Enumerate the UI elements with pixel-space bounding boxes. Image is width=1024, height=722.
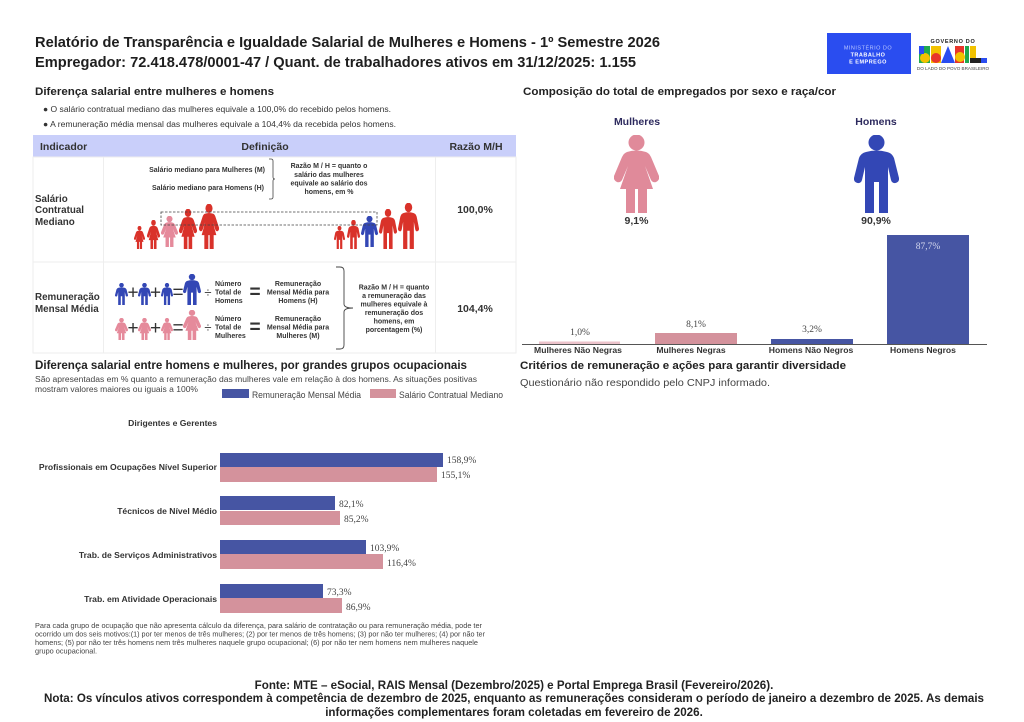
formula: remuneração mulheres: Mulheres (215, 333, 246, 340)
value labels (327, 456, 476, 613)
definition: razão M/H remuneração: porcentagem (%) (366, 327, 422, 334)
logo: Ministério do Trabalho e Emprego: E EMPREGO (849, 60, 887, 66)
row label: salário contratual mediano (35, 194, 84, 228)
bar chart: sexo e raça/cor: Homens Negros (890, 345, 956, 355)
category labels: Trab. em Atividade Operacionais (84, 594, 217, 604)
title: Empregador: 72.418.478/0001-47 / Quant. de trabalhadores ativos em 31/12/2025: 1.155 (35, 55, 636, 71)
definition: razão M/H salário (290, 163, 368, 196)
definition: razão M/H salário: Razão M / H = quanto o (291, 163, 367, 170)
logo: Ministério do Trabalho e Emprego: MINISTÉRIO DO (844, 44, 892, 52)
formula: remuneração homens: Homens (H) (278, 298, 318, 305)
formula: remuneração mulheres: + (127, 318, 139, 339)
definition: razão M/H remuneração: mulheres equivale à (361, 302, 428, 308)
formula: remuneração homens: ÷ (204, 285, 212, 300)
text block: explicação: mostram valores maiores ou iguais a 100% (35, 384, 198, 394)
heading: grupos ocupacionais: Diferença salarial entre homens e mulheres, por grandes grupos ocupacionais (35, 360, 467, 372)
formula: remuneração mulheres: = (172, 318, 184, 339)
value: homens: 90,9% (861, 215, 892, 227)
definition: salário mediano labels: Salário mediano para Mulheres (M) (149, 167, 265, 174)
value labels: 73,3% (327, 588, 352, 598)
heading: composição: Composição do total de empregados por sexo e raça/cor (523, 86, 837, 98)
value labels: 86,9% (346, 603, 371, 613)
value labels: 85,2% (344, 515, 369, 525)
formula: remuneração homens: Total de (215, 290, 241, 296)
panel: composição por sexo (614, 116, 899, 227)
formula: remuneração mulheres: + (150, 318, 161, 339)
footer: fonte e nota: Fonte: MTE – eSocial, RAIS Mensal (Dezembro/2025) e Portal Emprega Brasil (Fevereiro/2026). (255, 679, 773, 692)
table header: Indicador (40, 141, 87, 153)
row label: salário contratual mediano: Mediano (35, 217, 75, 228)
category labels: Trab. de Serviços Administrativos (79, 550, 217, 560)
definition: razão M/H salário: homens, em % (304, 189, 354, 196)
bar chart: sexo e raça/cor: 3,2% (802, 325, 822, 335)
text block: resumo: ● A remuneração média mensal das mulheres equivale a 104,4% da recebida pelos homens. (43, 119, 396, 129)
bars: salário contratual mediano (220, 467, 437, 613)
category labels: Técnicos de Nível Médio (117, 506, 217, 516)
footer: fonte e nota: Nota: Os vínculos ativos correspondem à competência de dezembro de 2025, enquanto as remunerações consideram o período de janeiro a dezembro de 2025. As demais (44, 692, 984, 705)
bar chart: sexo e raça/cor: 1,0% (570, 328, 590, 338)
definition: razão M/H remuneração: homens, em (374, 318, 414, 326)
definition: razão M/H salário: salário das mulheres (294, 172, 364, 179)
formula: remuneração homens: = (172, 282, 184, 304)
formula: remuneração mulheres: ÷ (204, 320, 212, 335)
text block: resumo (43, 104, 396, 129)
definition: razão M/H remuneração: remuneração dos (365, 310, 423, 317)
logo: Ministério do Trabalho e Emprego: TRABALHO (851, 52, 886, 58)
category labels: Dirigentes e Gerentes (128, 418, 217, 428)
legend: Remuneração Mensal Média (252, 390, 362, 401)
formula: remuneração homens (115, 274, 329, 305)
formula: remuneração mulheres: Total de (215, 324, 241, 332)
value labels: 82,1% (339, 500, 364, 510)
formula: remuneração mulheres: = (249, 317, 261, 338)
footnote: ocorrido um dos seis motivos:(1) por ter menos de três mulheres; (2) por ter menos de três homens; (3) por não ter mulheres; (4) por não ter (35, 630, 485, 638)
table header: Definição (241, 141, 289, 153)
icon: mulher (614, 134, 659, 213)
table header (40, 141, 503, 153)
bar chart: sexo e raça/cor: Mulheres Negras (656, 345, 726, 355)
value labels: 103,9% (370, 544, 399, 554)
bar chart: grupos ocupacionais (39, 418, 476, 613)
text block: resumo: ● O salário contratual mediano das mulheres equivale a 100,0% do recebido pelos homens. (43, 104, 391, 114)
footnote: homens; (5) por não ter três homens nem três mulheres naquele grupo ocupacional; (6) por não ter nem homens nem mulheres naquele (35, 638, 478, 647)
value labels: 116,4% (387, 559, 416, 569)
formula: remuneração mulheres: Remuneração (275, 316, 321, 323)
logo: Ministério do Trabalho e Emprego (827, 33, 911, 74)
text block: explicação (35, 374, 478, 394)
bar chart: sexo e raça/cor: Mulheres Não Negras (534, 345, 622, 355)
value: mulheres: 9,1% (625, 215, 649, 227)
icons: homens em ordem de salário (334, 203, 419, 249)
row label: remuneração mensal média: Mensal Média (35, 304, 99, 315)
formula: remuneração homens: + (127, 282, 139, 304)
definition: razão M/H remuneração: Razão M / H = quanto (359, 284, 429, 292)
footnote: Para cada grupo de ocupação que não apresenta cálculo da diferença, para salário de contratação ou para remuneração média, pode ter (35, 621, 482, 630)
formula: remuneração homens: + (150, 282, 161, 304)
icon: homem (854, 134, 899, 213)
formula: remuneração homens: = (249, 282, 261, 303)
bar chart: sexo e raça/cor: Homens Não Negros (769, 345, 853, 355)
row label: remuneração mensal média (35, 292, 100, 315)
title: Relatório de Transparência e Igualdade Salarial de Mulheres e Homens - 1º Semestre 2026 (35, 35, 660, 51)
definition: razão M/H remuneração: a remuneração das (362, 293, 426, 300)
formula: remuneração homens: Mensal Média para (267, 290, 329, 296)
bars: remuneração mensal média (220, 453, 443, 598)
table: indicadores (33, 135, 516, 353)
label: homens: Homens (855, 116, 897, 128)
footnote: grupo ocupacional. (35, 646, 97, 656)
bar chart: sexo e raça/cor (522, 235, 987, 355)
value: razão salário: 100,0% (457, 204, 493, 216)
bar chart: sexo e raça/cor: 87,7% (916, 242, 940, 252)
bar chart: sexo e raça/cor: 8,1% (686, 320, 706, 330)
footer: fonte e nota: informações complementares foram coletadas em fevereiro de 2026. (325, 706, 703, 719)
formula: remuneração mulheres: Mulheres (M) (276, 333, 320, 340)
row label: salário contratual mediano: Salário (35, 194, 68, 205)
legend: Salário Contratual Mediano (399, 390, 503, 401)
table header: Razão M/H (449, 141, 503, 153)
legend (222, 389, 503, 401)
category labels (39, 418, 218, 604)
formula: remuneração homens: Homens (215, 298, 243, 305)
label: mulheres: Mulheres (614, 116, 660, 128)
value labels: 155,1% (441, 471, 470, 481)
row label: remuneração mensal média: Remuneração (35, 292, 100, 303)
text block: explicação: São apresentadas em % quanto a remuneração das mulheres vale em relação à dos homens. As situações positivas (35, 374, 478, 384)
formula: remuneração homens: Remuneração (275, 281, 321, 288)
value labels: 158,9% (447, 456, 476, 466)
formula: remuneração mulheres: Número (215, 316, 241, 323)
value: razão remuneração: 104,4% (457, 303, 493, 315)
footer: fonte e nota (44, 679, 984, 719)
definition: razão M/H salário: equivale ao salário dos (290, 180, 368, 188)
row label: salário contratual mediano: Contratual (35, 205, 84, 216)
formula: remuneração homens: Número (215, 281, 241, 288)
text block: questionário: Questionário não respondido pelo CNPJ informado. (520, 378, 770, 389)
logo: Governo do Brasil (917, 39, 990, 71)
category labels: Profissionais em Ocupações Nível Superior (39, 462, 218, 472)
heading: diferença salarial: Diferença salarial entre mulheres e homens (35, 86, 274, 98)
formula: remuneração mulheres (115, 310, 329, 340)
footnote (35, 621, 485, 656)
logo: Governo do Brasil: GOVERNO DO (931, 39, 975, 45)
title (35, 35, 660, 71)
definition: salário mediano labels: Salário mediano para Homens (H) (152, 185, 264, 192)
logo: Governo do Brasil: DO LADO DO POVO BRASILEIRO (917, 66, 990, 71)
formula: remuneração mulheres: Mensal Média para (267, 324, 329, 332)
definition: salário mediano labels (149, 159, 275, 199)
icons: mulheres em ordem de salário (134, 204, 219, 249)
definition: razão M/H remuneração (336, 267, 429, 349)
heading: critérios: Critérios de remuneração e ações para garantir diversidade (520, 360, 846, 372)
